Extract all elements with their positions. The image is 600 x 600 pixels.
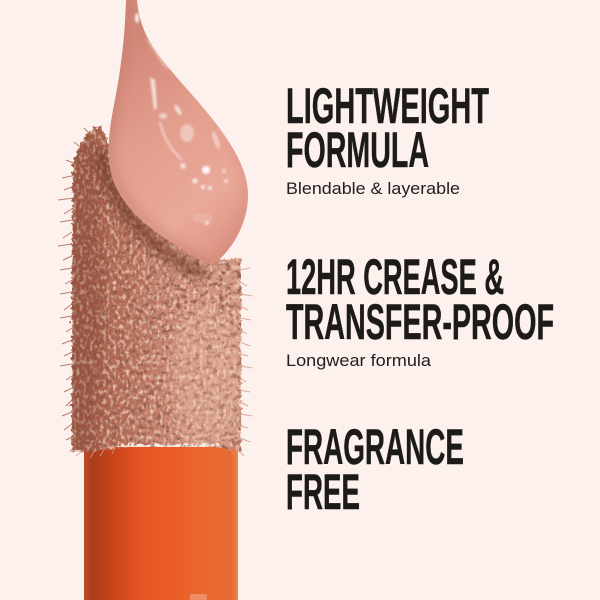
gloss highlights — [135, 13, 228, 225]
feature 1 heading — [286, 78, 489, 178]
feature 1 subtext: Blendable & layerable — [286, 180, 460, 198]
flocked sponge tip — [58, 120, 252, 470]
applicator tube — [84, 447, 238, 600]
edge bristles — [58, 128, 92, 452]
feature 1 heading: FORMULA — [286, 122, 429, 178]
feature 3 heading: FRAGRANCE — [286, 419, 464, 475]
feature 2 heading — [286, 249, 554, 350]
formula drop — [108, 0, 248, 266]
feature 3 heading: FREE — [286, 464, 360, 520]
feature 3 heading — [286, 419, 464, 520]
feature 2 subtext: Longwear formula — [286, 352, 432, 370]
product illustration: applicator with formula drop — [58, 0, 252, 600]
